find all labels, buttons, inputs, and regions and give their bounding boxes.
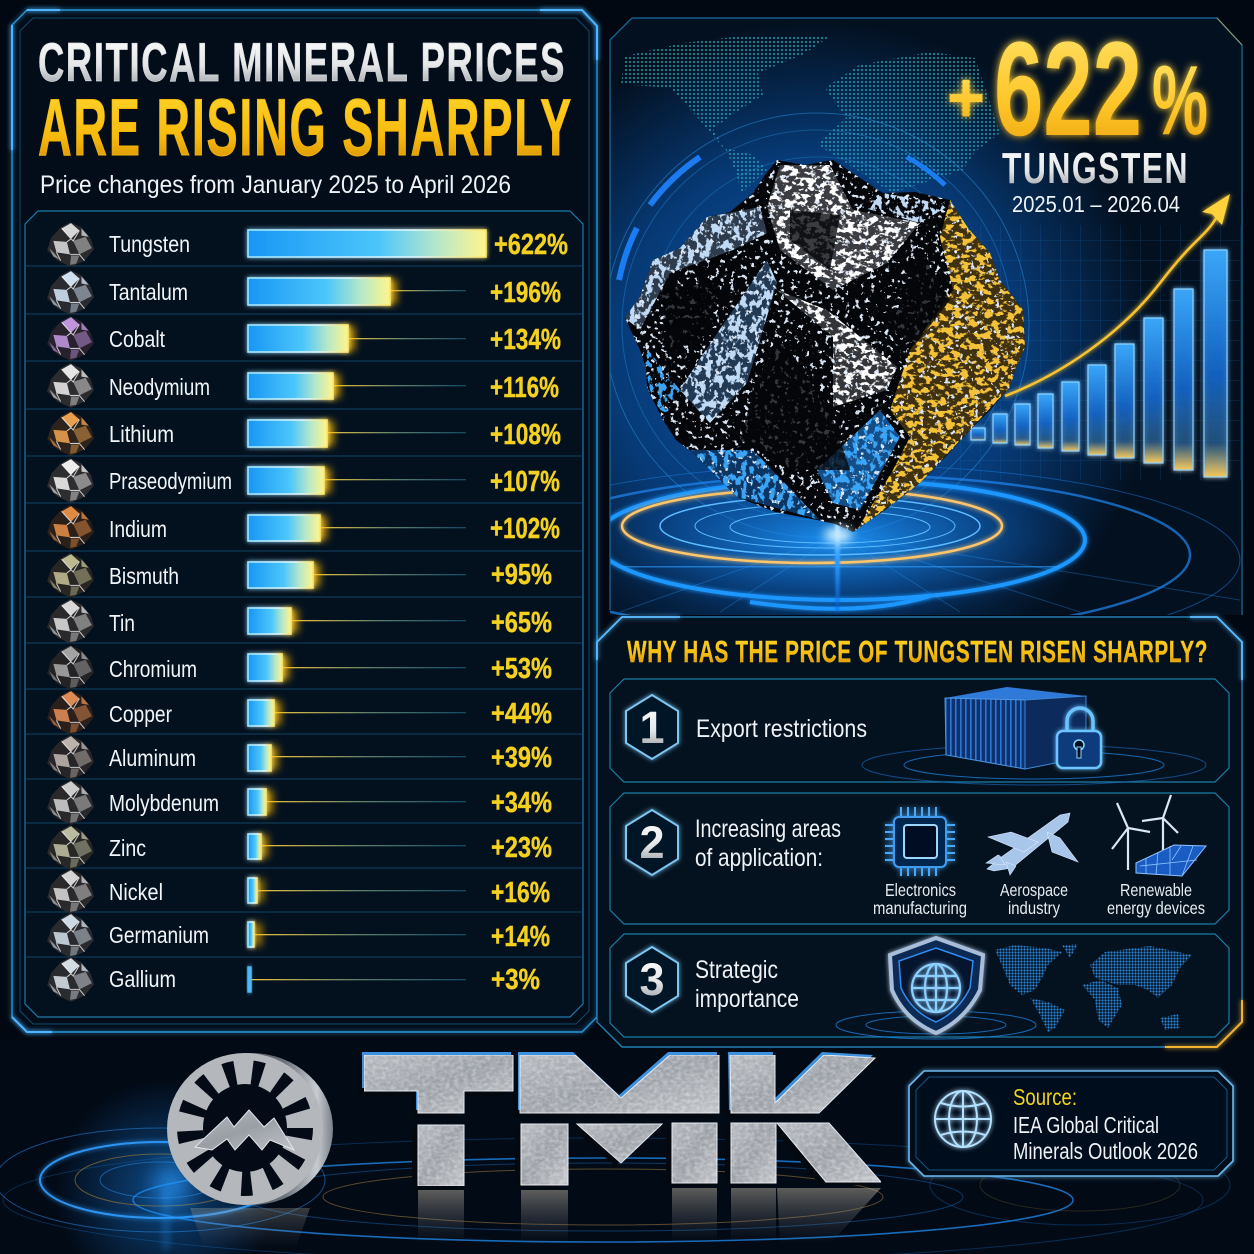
row: Aluminum: +39% <box>491 742 552 774</box>
rock: blue-white facets <box>625 193 950 423</box>
row: Nickel: Nickel <box>109 879 163 905</box>
row: Neodymium: +116% <box>490 372 559 404</box>
logo emblem <box>167 1053 333 1205</box>
row: Praseodymium: Praseodymium <box>109 468 232 494</box>
icon: wind turbines and solar panels <box>1112 795 1206 876</box>
row: Aluminum <box>47 735 552 780</box>
row: Indium: +102% <box>490 513 560 545</box>
row: Germanium: Germanium <box>109 922 209 948</box>
hexagon badge 1: 1 <box>639 702 665 753</box>
application labels <box>873 880 1205 918</box>
row: Tungsten: +622% <box>494 229 568 261</box>
source box: Minerals Outlook 2026 <box>1013 1138 1198 1164</box>
logo wordmark TMK <box>358 1052 881 1189</box>
row: Copper: Copper <box>109 701 172 727</box>
icon: globe <box>935 1091 991 1147</box>
row: Lithium: Lithium <box>109 421 174 447</box>
row: Tungsten: Tungsten <box>109 231 190 257</box>
row: Tungsten <box>47 222 568 267</box>
reason text: Strategic <box>695 956 778 984</box>
source text: Source: <box>1013 1084 1077 1110</box>
row: Tin: Tin <box>109 610 135 636</box>
reason 3: strategic importance <box>610 934 1229 1039</box>
row: Indium <box>47 505 560 550</box>
row: Nickel: +16% <box>491 877 550 909</box>
row: Tantalum: Tantalum <box>109 279 188 305</box>
hexagon badge 2: 2 <box>639 817 665 868</box>
row: Lithium: +108% <box>490 419 561 451</box>
panel: hero tungsten <box>610 18 1242 615</box>
application labels: energy devices <box>1107 898 1205 918</box>
reason text: of application: <box>695 844 823 872</box>
big number: % <box>1152 45 1208 155</box>
application labels: Aerospace <box>1000 880 1068 900</box>
application labels: manufacturing <box>873 898 967 918</box>
title line 2: ARE RISING SHARPLY <box>38 83 573 173</box>
table frame <box>25 211 583 1017</box>
row: Aluminum: Aluminum <box>109 745 196 771</box>
world map, dotted <box>621 35 1000 193</box>
floor rings <box>0 1128 1230 1254</box>
row: Lithium <box>47 411 561 456</box>
row: Copper: +44% <box>491 698 552 730</box>
row: Bismuth <box>47 553 552 598</box>
beam glow <box>824 527 852 543</box>
icon: world map <box>995 944 1192 1032</box>
reason text: Export restrictions <box>696 715 867 743</box>
hexagon badge 1 <box>626 695 678 759</box>
hexagon badge 3: 3 <box>639 954 665 1005</box>
row: Molybdenum: Molybdenum <box>109 790 219 816</box>
row: Indium: Indium <box>109 516 167 542</box>
chart: rising bars <box>971 250 1227 477</box>
reason 2: applications <box>610 793 1229 924</box>
row: Tantalum: +196% <box>490 277 561 309</box>
row: Praseodymium: +107% <box>490 466 560 498</box>
row: Molybdenum <box>47 780 552 825</box>
panel frame: hero <box>610 18 1242 615</box>
icon: aircraft <box>986 813 1078 875</box>
row: Zinc: +23% <box>491 832 552 864</box>
row: Praseodymium <box>47 458 560 503</box>
row: Cobalt: +134% <box>490 324 561 356</box>
big number <box>944 35 1213 142</box>
row: Neodymium: Neodymium <box>109 374 210 400</box>
row: Chromium <box>47 645 552 690</box>
icon: microchip <box>885 807 955 876</box>
source box: IEA Global Critical <box>1013 1112 1159 1138</box>
logo reflection <box>190 1188 881 1250</box>
row: Bismuth: +95% <box>491 559 552 591</box>
reason 1: export restrictions <box>610 679 1229 785</box>
row: Chromium: +53% <box>491 653 552 685</box>
row: Molybdenum: +34% <box>491 787 552 819</box>
row: Cobalt: Cobalt <box>109 326 166 352</box>
big number: 622 <box>994 15 1142 164</box>
application labels: Renewable <box>1120 880 1192 900</box>
reason text: importance <box>695 985 799 1013</box>
row: Gallium: +3% <box>491 964 540 996</box>
row: Cobalt <box>47 316 561 361</box>
radial HUD rings <box>605 113 1029 537</box>
date range: 2025.01 – 2026.04 <box>1012 191 1180 217</box>
rock: sparse sheen <box>620 155 1030 540</box>
row: Zinc: Zinc <box>109 835 146 861</box>
panel: why tungsten rose <box>597 617 1242 1047</box>
row: Gallium <box>47 957 540 1002</box>
rock: facet undertones <box>625 165 1025 530</box>
icon: shield and globe <box>836 938 1036 1039</box>
row: Zinc <box>47 825 552 870</box>
row: Copper <box>47 690 552 735</box>
reason text: Increasing areas <box>695 815 841 843</box>
row: Gallium: Gallium <box>109 966 176 992</box>
title line 1: CRITICAL MINERAL PRICES <box>38 31 566 93</box>
rock: deep-blue facets <box>640 340 900 520</box>
tungsten label: TUNGSTEN <box>1002 144 1189 193</box>
application labels: industry <box>1008 898 1060 918</box>
application labels: Electronics <box>885 880 956 900</box>
subtitle: Price changes from January 2025 to April 2026 <box>40 171 511 199</box>
row: Germanium <box>47 913 550 958</box>
hexagon badge 2 <box>626 810 678 875</box>
rock: white facets <box>767 165 920 407</box>
tungsten ore rock <box>620 155 1030 540</box>
source box <box>909 1071 1233 1176</box>
row: Germanium: +14% <box>491 921 550 953</box>
row: Neodymium <box>47 363 559 408</box>
big number: + <box>947 58 985 138</box>
icon: container with padlock <box>862 687 1206 785</box>
row: Tantalum <box>47 270 561 315</box>
rising arrow <box>1005 194 1230 396</box>
panel: price table <box>12 10 597 1032</box>
reason text <box>695 815 841 872</box>
hexagon badge 3 <box>626 947 678 1012</box>
reason text <box>695 956 799 1013</box>
rock: gold facets <box>857 200 1025 530</box>
row: Bismuth: Bismuth <box>109 563 179 589</box>
row: Chromium: Chromium <box>109 656 197 682</box>
row: Tin: +65% <box>491 607 552 639</box>
rock: shadow facets <box>660 210 950 470</box>
row: Nickel <box>47 869 550 914</box>
floor glow and rings <box>610 467 1240 615</box>
row: Tin <box>47 599 552 644</box>
